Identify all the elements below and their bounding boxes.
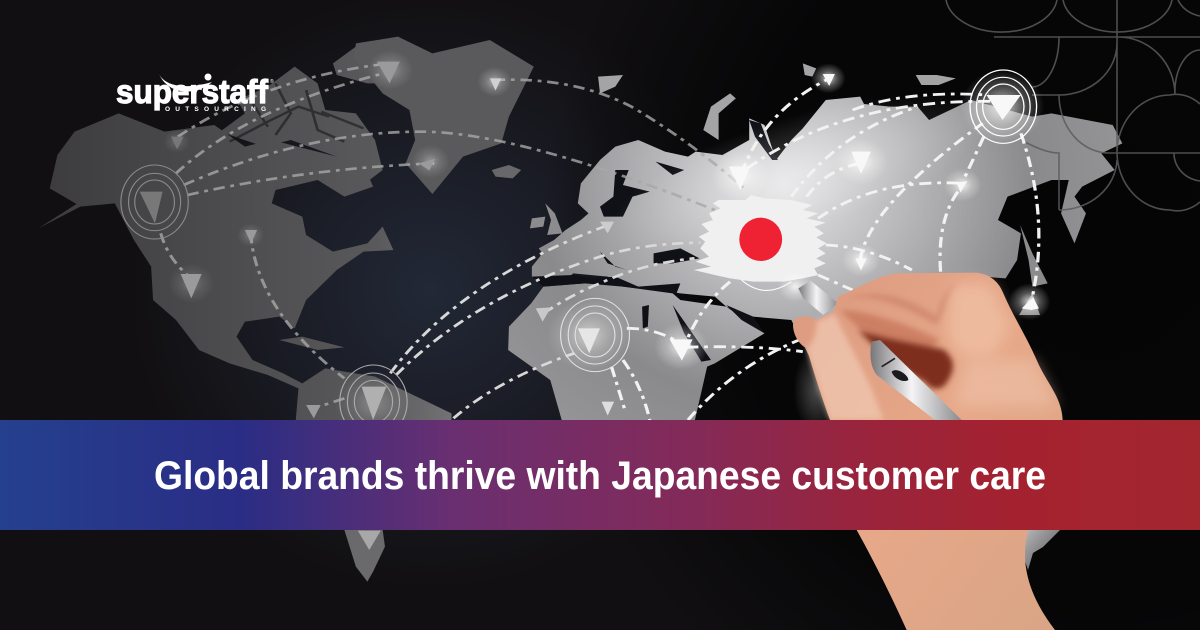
map: Sakhalin and Japan [1019,225,1048,315]
logo figure [204,74,212,80]
arrow markers [140,50,1050,550]
thumb shading [807,313,883,420]
map: Greenland [354,37,534,194]
palm crease [858,330,953,389]
title: Global brands thrive with Japanese customer care [154,454,1046,498]
world map [38,37,1122,582]
rings: South America [340,365,407,438]
map: Australia [1024,530,1060,570]
index finger underside [840,310,940,350]
logo wordmark: superstaff [116,73,269,110]
map: Americas [38,47,452,433]
map: Africa and Arabia [508,280,765,433]
pen clip detail [892,370,908,381]
pen tip [798,281,838,315]
triangles [140,62,501,550]
faint ring under flag [742,280,791,290]
target rings [121,70,1037,438]
route lines [161,63,1039,420]
map: Arctic channels [230,83,364,142]
pen barrel [870,340,962,420]
glows [163,50,1050,437]
knuckle highlight [947,283,1010,357]
routes: Americas [161,63,746,408]
routes: Eurasia [611,78,1039,420]
map: Iceland [492,165,521,178]
title banner [0,420,1200,530]
Japanese flag [694,195,827,302]
rings: Alaska [121,165,188,239]
map: Arctic islands [598,63,956,140]
rings: Africa [561,298,629,372]
rings: Siberia [970,70,1037,143]
registered mark: ® [270,78,274,85]
logo tagline: OUTSOURCING [165,106,266,113]
routes: Atlantic [390,225,700,418]
map: Eurasia [532,97,1122,367]
brush stroke [694,195,827,282]
red sun [739,218,782,261]
map: seas [532,120,778,362]
back of hand highlight [953,360,1057,407]
map: South America tip [344,530,385,582]
glow on map [590,61,1008,286]
finger shading [840,280,960,325]
map: UK and Ireland [530,203,562,235]
hand shape [793,273,1063,630]
logo [116,73,274,113]
hand glow [793,347,840,433]
hand holding pen [793,273,1063,630]
logo swoosh [159,74,212,92]
decorative arcs [946,0,1200,211]
